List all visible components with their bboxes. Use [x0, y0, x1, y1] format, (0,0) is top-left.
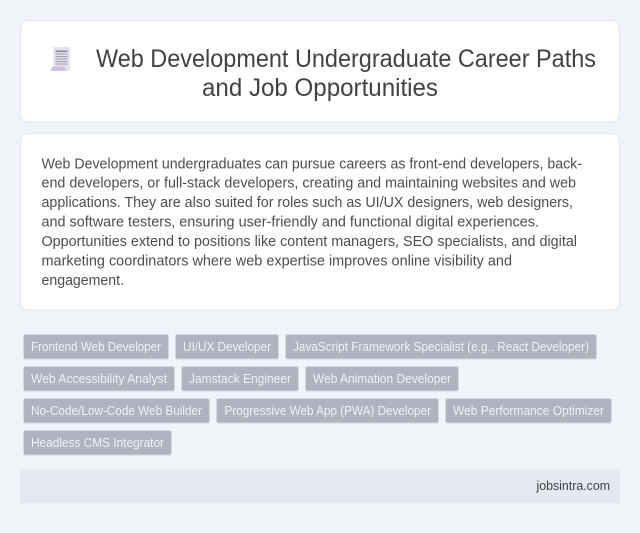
tag: Web Accessibility Analyst: [24, 366, 174, 391]
tag: UI/UX Developer: [176, 334, 278, 359]
text block: career summary: and software testers, ensuring user-friendly and functional digital experiences.: [42, 214, 539, 231]
text block: career summary: end developers, or full-stack developers, creating and maintaining websites and web: [42, 175, 576, 192]
tag list: job roles: [24, 334, 612, 455]
tag: JavaScript Framework Specialist: [286, 334, 596, 359]
panel: header: [20, 20, 620, 122]
footer source text: jobsintra.com: [536, 478, 610, 493]
title: and Job Opportunities: [202, 74, 438, 102]
title: [96, 45, 596, 102]
tag: Jamstack Engineer: [182, 366, 298, 391]
text block: career summary: engagement.: [42, 272, 124, 289]
tag: Headless CMS Integrator: Headless CMS Integrator: [31, 435, 165, 450]
tag: Web Performance Optimizer: [446, 398, 612, 423]
tag: UI/UX Developer: UI/UX Developer: [183, 339, 272, 354]
tag: Web Animation Developer: Web Animation Developer: [313, 371, 452, 386]
title: Web Development Undergraduate Career Paths: [96, 45, 596, 73]
tag: Progressive Web App (PWA) Developer: Progressive Web App (PWA) Developer: [224, 403, 432, 418]
tag: No-Code/Low-Code Web Builder: [24, 398, 210, 423]
tag: Web Accessibility Analyst: Web Accessibility Analyst: [31, 371, 167, 386]
tag: Progressive Web App (PWA) Developer: [216, 398, 438, 423]
tag: Web Performance Optimizer: Web Performance Optimizer: [453, 403, 605, 418]
tag: JavaScript Framework Specialist: JavaScript Framework Specialist (e.g., React Developer): [293, 339, 589, 354]
tag: Frontend Web Developer: [24, 334, 168, 359]
footer bar: [20, 469, 620, 503]
text block: career summary: Opportunities extend to positions like content managers, SEO specialists, and digital: [42, 233, 577, 250]
icon: document scroll: [51, 47, 70, 71]
text block: career summary: Web Development undergraduates can pursue careers as front-end developers, back-: [42, 155, 582, 172]
tag: Headless CMS Integrator: [24, 430, 172, 455]
tag: Jamstack Engineer: Jamstack Engineer: [189, 371, 292, 386]
tag: Frontend Web Developer: Frontend Web Developer: [31, 339, 162, 354]
tag: No-Code/Low-Code Web Builder: No-Code/Low-Code Web Builder: [31, 403, 203, 418]
tag: Web Animation Developer: [306, 366, 458, 391]
text block: career summary: [42, 155, 582, 289]
text block: career summary: marketing coordinators where web expertise improves online visibility and: [42, 253, 512, 270]
panel: description: [20, 134, 620, 310]
text block: career summary: applications. They are also suited for roles such as UI/UX designers, web designers,: [42, 194, 573, 211]
